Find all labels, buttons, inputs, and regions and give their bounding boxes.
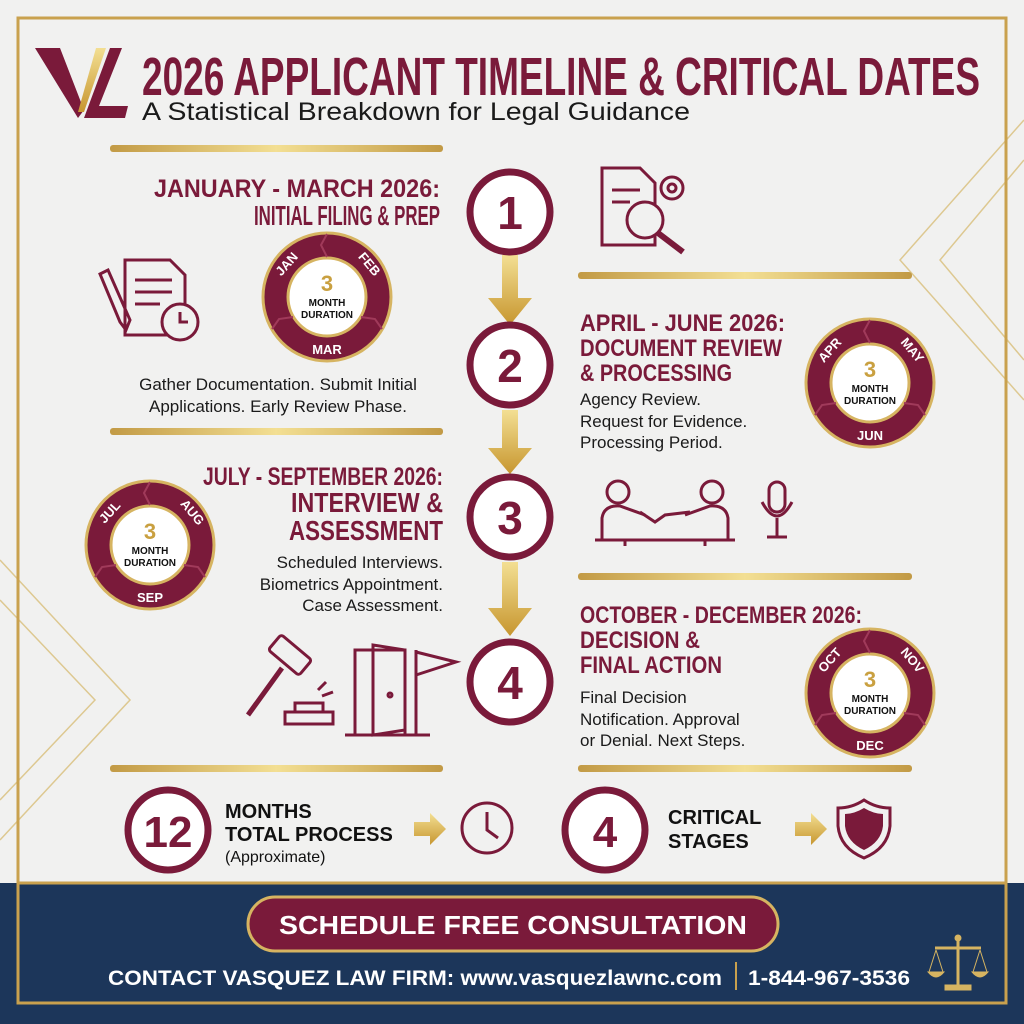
stat: 4 critical stages: STAGES (668, 831, 749, 853)
ring: Oct-Dec: DEC (856, 738, 884, 753)
icon: gavel (248, 634, 333, 724)
icon: scales of justice (928, 935, 988, 990)
stage 2 text (580, 390, 747, 452)
ring: Apr-Jun: MONTH (852, 384, 888, 395)
step circles: 2 (497, 340, 523, 392)
stat: 4 critical stages: 4 (593, 808, 618, 857)
ring: Apr-Jun: 3 (864, 357, 876, 382)
contact line: 1-844-967-3536 (748, 967, 910, 990)
stage 2 heading: & PROCESSING (580, 360, 732, 387)
step circles: 4 (497, 657, 523, 709)
decorative lines (0, 120, 1024, 840)
icon: microphone (762, 482, 792, 537)
stage 2 heading: DOCUMENT REVIEW (580, 335, 782, 362)
stage 4 text: Final Decision (580, 688, 687, 707)
step circles: 1 (497, 187, 523, 239)
stage 3 heading (203, 463, 443, 546)
stage 4 heading: OCTOBER - DECEMBER 2026: (580, 602, 862, 629)
stage 2 heading (580, 310, 785, 387)
stat: 12 months: TOTAL PROCESS (225, 824, 393, 846)
ring: Jul-Sep: 3 (144, 519, 156, 544)
subtitle: A Statistical Breakdown for Legal Guidance (142, 98, 690, 126)
stage 3 heading: JULY - SEPTEMBER 2026: (203, 463, 443, 491)
stage 2 text: Request for Evidence. (580, 412, 747, 431)
ring: Apr-Jun: DURATION (844, 396, 896, 407)
gold dividers (110, 145, 912, 772)
ring: Oct-Dec: DURATION (844, 706, 896, 717)
stage 4 heading: FINAL ACTION (580, 652, 722, 679)
stage 1 heading (154, 175, 440, 231)
stage 4 text (580, 688, 745, 750)
stat: 4 critical stages: CRITICAL (668, 807, 761, 829)
contact line: CONTACT VASQUEZ LAW FIRM: www.vasquezlawnc.com (108, 967, 722, 990)
step circles: 3 (497, 492, 523, 544)
icon: handshake meeting (595, 481, 735, 546)
stage 4 text: or Denial. Next Steps. (580, 731, 745, 750)
button: schedule consultation (248, 897, 778, 951)
icon: document with pencil and clock (100, 260, 198, 340)
contact line (108, 962, 910, 990)
ring: Oct-Dec: OCT (815, 645, 844, 675)
ring: Jan-Mar: FEB (355, 249, 384, 279)
button: schedule consultation: SCHEDULE FREE CONSULTATION (279, 910, 747, 940)
stage 2 heading: APRIL - JUNE 2026: (580, 310, 785, 337)
ring: Jan-Mar: DURATION (301, 310, 353, 321)
arrow and shield icon (795, 800, 890, 858)
ring: Jan-Mar: MAR (312, 342, 342, 357)
ring: Jan-Mar: JAN (272, 249, 301, 279)
stage 1 text: Applications. Early Review Phase. (149, 397, 407, 416)
ring: Jul-Sep: MONTH (132, 546, 168, 557)
ring: Jul-Sep: AUG (177, 496, 207, 528)
arrows between steps (488, 255, 532, 636)
stage 3 heading: ASSESSMENT (289, 515, 443, 546)
ring: Jan-Mar: 3 (321, 271, 333, 296)
icon: document with magnifier and gear (602, 168, 683, 252)
stat: 12 months (128, 790, 393, 870)
ring: Oct-Dec: MONTH (852, 694, 888, 705)
stage 2 text: Processing Period. (580, 433, 723, 452)
ring: Oct-Dec (806, 629, 934, 757)
ring: Jan-Mar: MONTH (309, 298, 345, 309)
stat: 12 months: 12 (144, 808, 192, 857)
stage 4 heading (580, 602, 862, 679)
stat: 4 critical stages (565, 790, 761, 870)
logo VL (35, 48, 128, 118)
ring: Jan-Mar (263, 233, 391, 361)
ring: Apr-Jun: JUN (857, 428, 883, 443)
ring: Jul-Sep: JUL (96, 498, 123, 526)
ring: Oct-Dec: NOV (898, 644, 927, 676)
step circles (470, 172, 550, 722)
ring: Apr-Jun: MAY (898, 335, 927, 366)
stage 2 text: Agency Review. (580, 390, 701, 409)
ring: Oct-Dec: 3 (864, 667, 876, 692)
stage 4 text: Notification. Approval (580, 710, 740, 729)
ring: Jul-Sep: DURATION (124, 558, 176, 569)
stage 4 heading: DECISION & (580, 627, 700, 654)
stage 1 heading: INITIAL FILING & PREP (254, 200, 440, 231)
ring: Jul-Sep: SEP (137, 590, 163, 605)
stage 3 heading: INTERVIEW & (291, 487, 443, 518)
icon: open door with flag (345, 645, 456, 735)
stat: 12 months: MONTHS (225, 801, 312, 823)
stage 3 text: Scheduled Interviews. (277, 553, 443, 572)
stage 3 text: Case Assessment. (302, 596, 443, 615)
footer band (0, 883, 1024, 1024)
stage 3 text: Biometrics Appointment. (260, 575, 443, 594)
stage 3 text (260, 553, 443, 615)
stat: 12 months: (Approximate) (225, 849, 325, 866)
stage 1 text: Gather Documentation. Submit Initial (139, 375, 417, 394)
stage 1 heading: JANUARY - MARCH 2026: (154, 175, 440, 203)
stage 1 text (139, 375, 417, 416)
arrow and clock icon (414, 803, 512, 853)
ring: Apr-Jun: APR (815, 334, 845, 365)
ring: Apr-Jun (806, 319, 934, 447)
ring: Jul-Sep (86, 481, 214, 609)
